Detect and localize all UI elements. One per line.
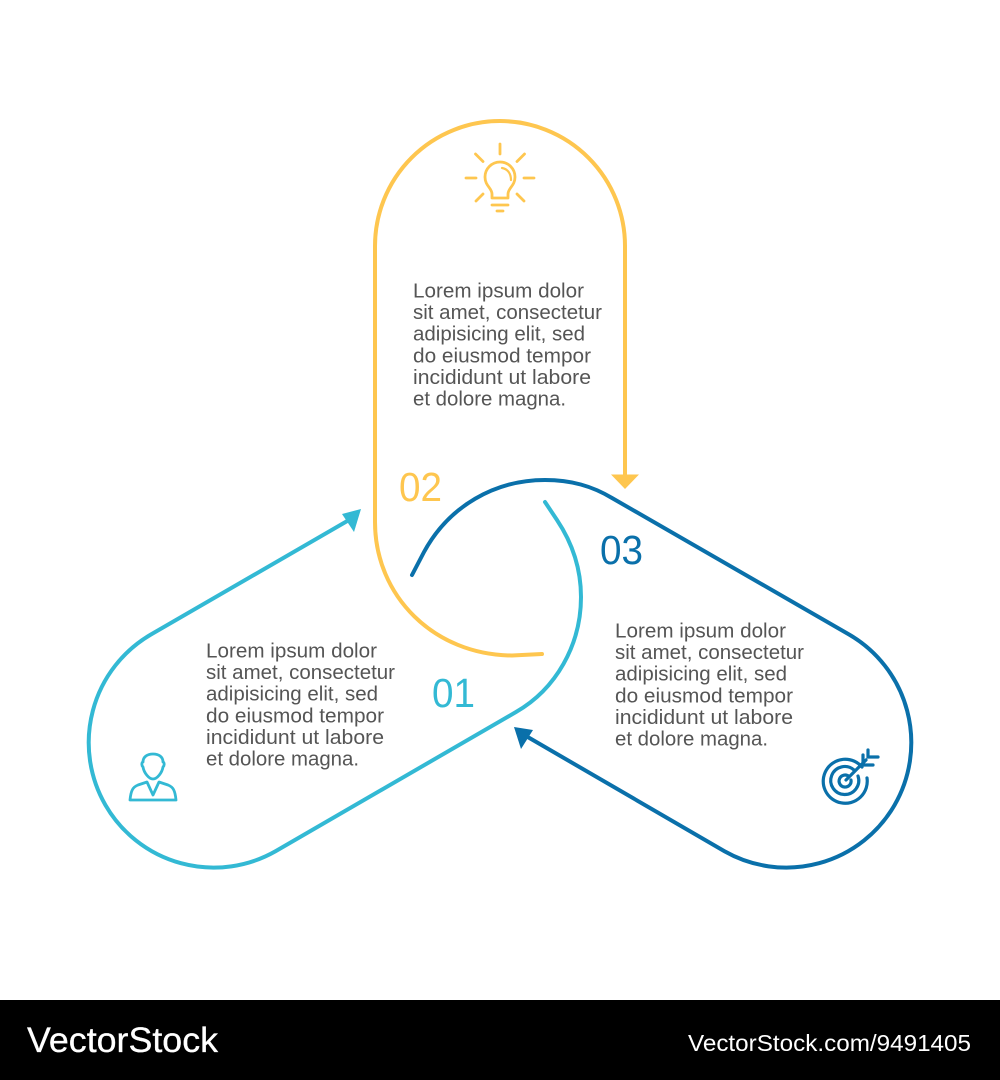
text block 03: incididunt ut labore	[615, 706, 793, 729]
text block 02: incididunt ut labore	[413, 366, 591, 389]
text block 03: et dolore magna.	[615, 728, 768, 750]
text block 03: Lorem ipsum dolor	[615, 620, 786, 642]
text block 03: adipisicing elit, sed	[615, 662, 787, 686]
text block 01	[206, 640, 395, 770]
text block 03: sit amet, consectetur	[615, 641, 804, 664]
text block 02: sit amet, consectetur	[413, 301, 602, 324]
loop 02: yellow outline	[375, 121, 639, 656]
text block 02: adipisicing elit, sed	[413, 322, 585, 346]
text block 02: Lorem ipsum dolor	[413, 280, 584, 302]
text block 02	[413, 280, 602, 410]
text block 01: sit amet, consectetur	[206, 661, 395, 684]
text block 01: adipisicing elit, sed	[206, 682, 378, 706]
text block 02: do eiusmod tempor	[413, 344, 591, 368]
text block 01: do eiusmod tempor	[206, 704, 384, 728]
text block 03	[615, 620, 804, 750]
number 02: 02	[399, 464, 442, 510]
number 03: 03	[600, 527, 643, 573]
watermark brand: VectorStock	[27, 1021, 219, 1060]
watermark url: VectorStock.com/9491405	[688, 1030, 971, 1056]
icon: target	[823, 750, 878, 803]
footer bar	[0, 1000, 1000, 1080]
text block 03: do eiusmod tempor	[615, 684, 793, 708]
text block 01: et dolore magna.	[206, 748, 359, 770]
text block 02: et dolore magna.	[413, 388, 566, 410]
icon: light bulb	[466, 144, 534, 211]
icon: person	[130, 754, 176, 800]
loop 03: blue outline	[412, 480, 911, 868]
loop 01: cyan outline	[89, 502, 581, 868]
number 01: 01	[432, 670, 475, 716]
text block 01: incididunt ut labore	[206, 726, 384, 749]
text block 01: Lorem ipsum dolor	[206, 640, 377, 662]
